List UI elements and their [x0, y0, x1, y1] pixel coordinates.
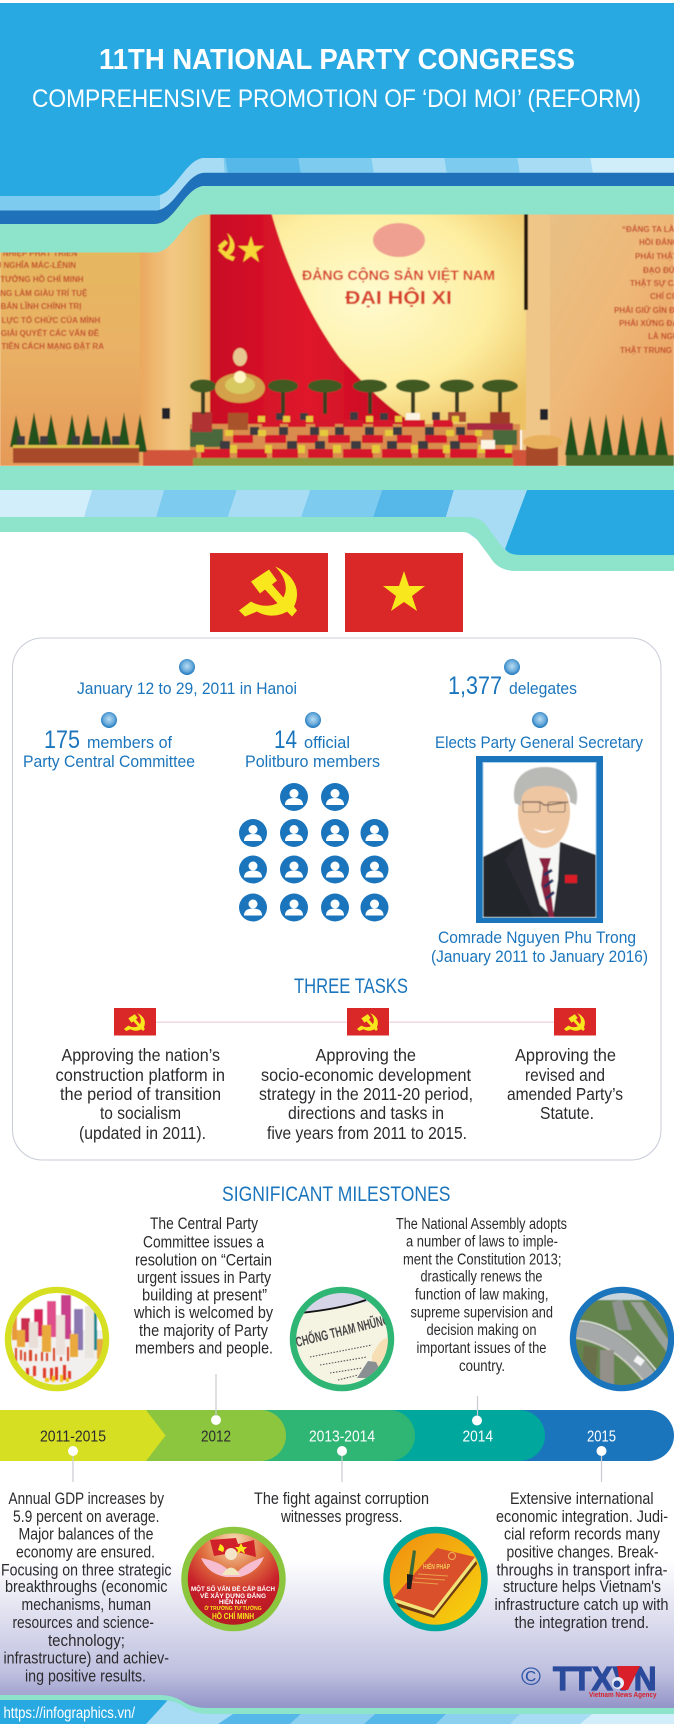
picture circle: Party building poster: Ở TRƯỜNG TƯ TƯỞNG — [204, 1604, 262, 1612]
photo: left wall slogans: NHIỆP PHÁT TRIỂN — [3, 249, 77, 258]
photo: backdrop lettering — [302, 266, 495, 308]
milestone 2014 text: country. — [459, 1358, 505, 1375]
title: 11TH NATIONAL PARTY CONGRESS — [99, 44, 575, 76]
flag: national — [345, 553, 463, 632]
milestone 2014 text — [396, 1216, 567, 1375]
picture circle: anti-corruption document: CHỐNG THAM NHŨNG — [294, 1310, 391, 1350]
milestone 2013-2014 text: witnesses progress. — [280, 1508, 402, 1526]
timeline label 2011-2015: 2011-2015 — [40, 1428, 106, 1446]
photo: side table — [13, 447, 139, 463]
task 2 text: five years from 2011 to 2015. — [267, 1123, 467, 1143]
photo: presidium seats — [193, 412, 513, 466]
fact: general secretary label — [435, 712, 643, 752]
fact: central committee: 175 — [44, 726, 80, 754]
photo: bust and flowers — [215, 348, 265, 430]
lower mint band under photo — [0, 466, 674, 490]
task 3 text: Approving the — [515, 1045, 616, 1065]
timeline label 2012: 2012 — [201, 1428, 231, 1446]
milestone 2015 text: Extensive international — [510, 1490, 654, 1508]
milestone 2014 text: ment the Constitution 2013; — [403, 1252, 562, 1268]
picture circle: bar charts — [0, 1282, 115, 1388]
task 1 text: to socialism — [100, 1103, 181, 1123]
fact: politburo: 14 — [274, 726, 297, 754]
header: blue title panel — [0, 3, 674, 196]
heading: three tasks: THREE TASKS — [294, 975, 408, 998]
picture circle: highway interchange — [570, 1290, 674, 1392]
panel: congress facts — [12, 638, 661, 1160]
milestone 2011-2015 text: ing positive results. — [25, 1668, 146, 1686]
milestone 2011-2015 text: infrastructure) and achiev- — [4, 1650, 169, 1668]
picture circle: Party building poster — [184, 1530, 282, 1628]
milestone 2012 text: The Central Party — [150, 1215, 259, 1233]
task 3 text: amended Party’s — [507, 1084, 623, 1104]
copyright mark: © — [521, 1663, 542, 1691]
milestone 2011-2015 text: Major balances of the — [18, 1526, 154, 1544]
photo: lectern — [523, 435, 563, 466]
task 2 text: socio-economic development — [261, 1065, 471, 1085]
picture circle: Constitution book: HIẾN PHÁP — [423, 1561, 450, 1571]
task flag 3 — [554, 1008, 596, 1036]
photo: stage base and floor — [143, 412, 530, 466]
timeline bar — [0, 1410, 674, 1461]
dark blue ribbon — [0, 173, 674, 224]
milestone 2012 text: building at present” — [142, 1286, 267, 1304]
milestone 2014 text: The National Assembly adopts — [396, 1216, 567, 1233]
milestone 2012 text: the majority of Party — [139, 1322, 269, 1340]
photo: curtain star and sickle — [218, 233, 264, 262]
milestone 2013-2014 text — [254, 1490, 429, 1526]
milestone 2015 text — [494, 1490, 668, 1632]
milestone 2014 text: supreme supervision and — [410, 1304, 553, 1322]
fact: delegates: delegates — [509, 679, 577, 698]
photo: pines left — [10, 412, 147, 452]
lower mint curve — [0, 517, 674, 571]
flag: party — [210, 553, 328, 632]
fact: general secretary label: Elects Party General Secretary — [435, 733, 643, 752]
milestone 2012 text — [133, 1215, 274, 1358]
fact: central committee: Party Central Committee — [23, 752, 195, 771]
picture circle: Party building poster: HIỆN NAY — [219, 1598, 247, 1606]
heading: significant milestones: SIGNIFICANT MILESTONES — [222, 1183, 450, 1206]
milestone 2011-2015 text: economy are ensured. — [16, 1544, 155, 1562]
fact: delegates — [448, 659, 577, 700]
photo: congress hall stage — [0, 200, 674, 466]
milestone 2014 text: important issues of the — [416, 1340, 546, 1357]
task flag 2 — [347, 1008, 389, 1036]
fact: politburo — [245, 712, 380, 771]
fact: central committee — [23, 712, 195, 771]
bottom gradient background — [0, 1560, 674, 1710]
logo: TTXVN — [521, 1660, 657, 1699]
milestone 2013-2014 text: The fight against corruption — [254, 1490, 429, 1508]
milestone 2014 text: function of law making, — [415, 1286, 548, 1304]
task 2 text: directions and tasks in — [288, 1103, 444, 1123]
photo: left wall slogans — [0, 249, 104, 351]
task flag 1 — [114, 1008, 156, 1036]
photo: party emblem on backdrop — [373, 223, 425, 257]
task 3 text: Statute. — [540, 1103, 594, 1123]
fact: politburo: official — [304, 733, 350, 752]
task 2 text — [259, 1045, 473, 1143]
photo: left wall slogans: BẢN LĨNH CHÍNH TRỊ — [1, 302, 81, 311]
timeline label 2013-2014: 2013-2014 — [309, 1428, 375, 1446]
milestone 2011-2015 text: mechanisms, human — [22, 1596, 151, 1614]
milestone 2012 text: urgent issues in Party — [137, 1269, 272, 1287]
photo: pines right — [565, 414, 668, 455]
photo: right wall slogans — [614, 225, 674, 355]
picture circle: Party building poster: VỀ XÂY DỰNG ĐẢNG — [200, 1593, 266, 1600]
fact: delegates: 1,377 — [448, 672, 502, 700]
milestone 2012 text: which is welcomed by — [133, 1304, 274, 1322]
portrait caption: (January 2011 to January 2016) — [431, 947, 648, 966]
footer ribbon — [0, 1695, 674, 1724]
task 1 text — [56, 1045, 225, 1143]
timeline label 2014: 2014 — [462, 1428, 493, 1446]
logo tagline: Vietnam News Agency — [589, 1692, 657, 1699]
task 2 text: strategy in the 2011-20 period, — [259, 1084, 473, 1104]
icons: politburo members grid — [239, 783, 388, 922]
fact: central committee: members of — [87, 733, 172, 752]
logo wordmark: TTXVN — [553, 1660, 656, 1697]
portrait caption — [431, 928, 648, 966]
milestone 2012 text: resolution on “Certain — [135, 1252, 272, 1270]
milestone 2012 text: members and people. — [135, 1340, 273, 1358]
milestone 2011-2015 text: resources and science- — [12, 1614, 154, 1632]
milestone 2014 text: decision making on — [426, 1322, 536, 1339]
picture circle: anti-corruption document — [293, 1290, 392, 1388]
milestone 2011-2015 text — [1, 1490, 172, 1686]
milestone 2011-2015 text: Focusing on three strategic — [1, 1562, 172, 1580]
task 3 text — [507, 1045, 623, 1123]
milestone 2011-2015 text: technology; — [48, 1632, 125, 1650]
lower striped band — [0, 490, 674, 560]
task 1 text: the period of transition — [60, 1084, 221, 1104]
milestone 2015 text: the integration trend. — [514, 1614, 649, 1632]
milestone 2014 text: a number of laws to imple- — [406, 1234, 558, 1250]
task 3 text: revised and — [525, 1065, 605, 1085]
milestone 2011-2015 text: breakthroughs (economic — [5, 1578, 168, 1596]
task 2 text: Approving the — [316, 1045, 416, 1065]
source url: https://infographics.vn/ — [4, 1705, 136, 1722]
mint ribbon over photo — [0, 186, 674, 252]
fact: date and place — [77, 659, 297, 698]
milestone 2012 text: Committee issues a — [143, 1234, 265, 1252]
portrait: Nguyen Phu Trong — [476, 756, 603, 923]
picture circle: Constitution book — [386, 1530, 484, 1628]
milestone 2011-2015 text: Annual GDP increases by — [8, 1490, 165, 1508]
fact: politburo: Politburo members — [245, 752, 380, 771]
picture circle: Party building poster: HỒ CHÍ MINH — [212, 1610, 254, 1621]
timeline label 2015: 2015 — [587, 1428, 616, 1446]
fact: date and place: January 12 to 29, 2011 in Hanoi — [77, 679, 297, 698]
photo: backdrop lettering: ĐẠI HỘI XI — [345, 287, 452, 308]
picture circle: Party building poster: MỘT SỐ VẤN ĐỀ CẤP BÁCH — [191, 1585, 275, 1593]
photo: backdrop lettering: ĐẢNG CỘNG SẢN VIỆT NAM — [302, 266, 495, 283]
milestone 2011-2015 text: 5.9 percent on average. — [13, 1508, 160, 1526]
striped ribbon upper — [0, 158, 674, 210]
milestone 2014 text: drastically renews the — [420, 1268, 542, 1286]
photo: potted plants — [190, 380, 518, 424]
portrait caption: Comrade Nguyen Phu Trong — [438, 928, 636, 947]
task 1 text: Approving the nation’s — [62, 1045, 220, 1065]
task 1 text: construction platform in — [56, 1065, 225, 1085]
task 1 text: (updated in 2011). — [79, 1123, 206, 1143]
